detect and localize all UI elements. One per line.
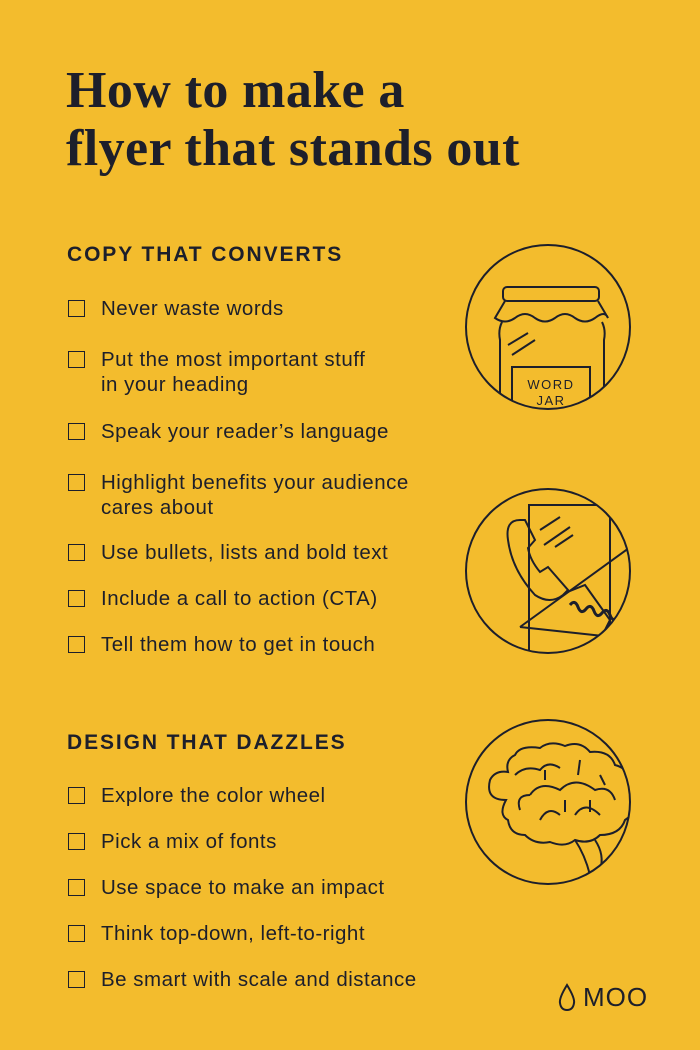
logo: MOO: MOO: [583, 982, 648, 1012]
heading: design that dazzles: DESIGN THAT DAZZLES: [67, 731, 347, 754]
icon: word jar: WORD: [527, 377, 575, 392]
title: How to make a: [66, 62, 405, 119]
checklist: copy: [68, 297, 409, 656]
item: in your heading: [101, 373, 249, 396]
title: flyer that stands out: [66, 120, 520, 177]
item: [68, 471, 409, 519]
heading: copy that converts: COPY THAT CONVERTS: [67, 243, 343, 266]
item: Put the most important stuff: [101, 348, 365, 371]
item: Tell them how to get in touch: [101, 633, 375, 656]
item: cares about: [101, 496, 214, 519]
item: Be smart with scale and distance: [101, 968, 417, 991]
icon: phone and envelope: [465, 488, 631, 654]
icon: brain: [465, 719, 631, 885]
icon: word jar: JAR: [536, 393, 566, 408]
title: [66, 62, 520, 177]
item: Use bullets, lists and bold text: [101, 541, 388, 564]
item: Explore the color wheel: [101, 784, 326, 807]
item: Include a call to action (CTA): [101, 587, 378, 610]
icon: word jar: [465, 244, 631, 410]
item: Use space to make an impact: [101, 876, 385, 899]
item: Never waste words: [101, 297, 284, 320]
checklist: design: [68, 784, 417, 991]
item: [68, 348, 365, 396]
item: Speak your reader’s language: [101, 420, 389, 443]
item: Pick a mix of fonts: [101, 830, 277, 853]
item: Highlight benefits your audience: [101, 471, 409, 494]
item: Think top-down, left-to-right: [101, 922, 365, 945]
